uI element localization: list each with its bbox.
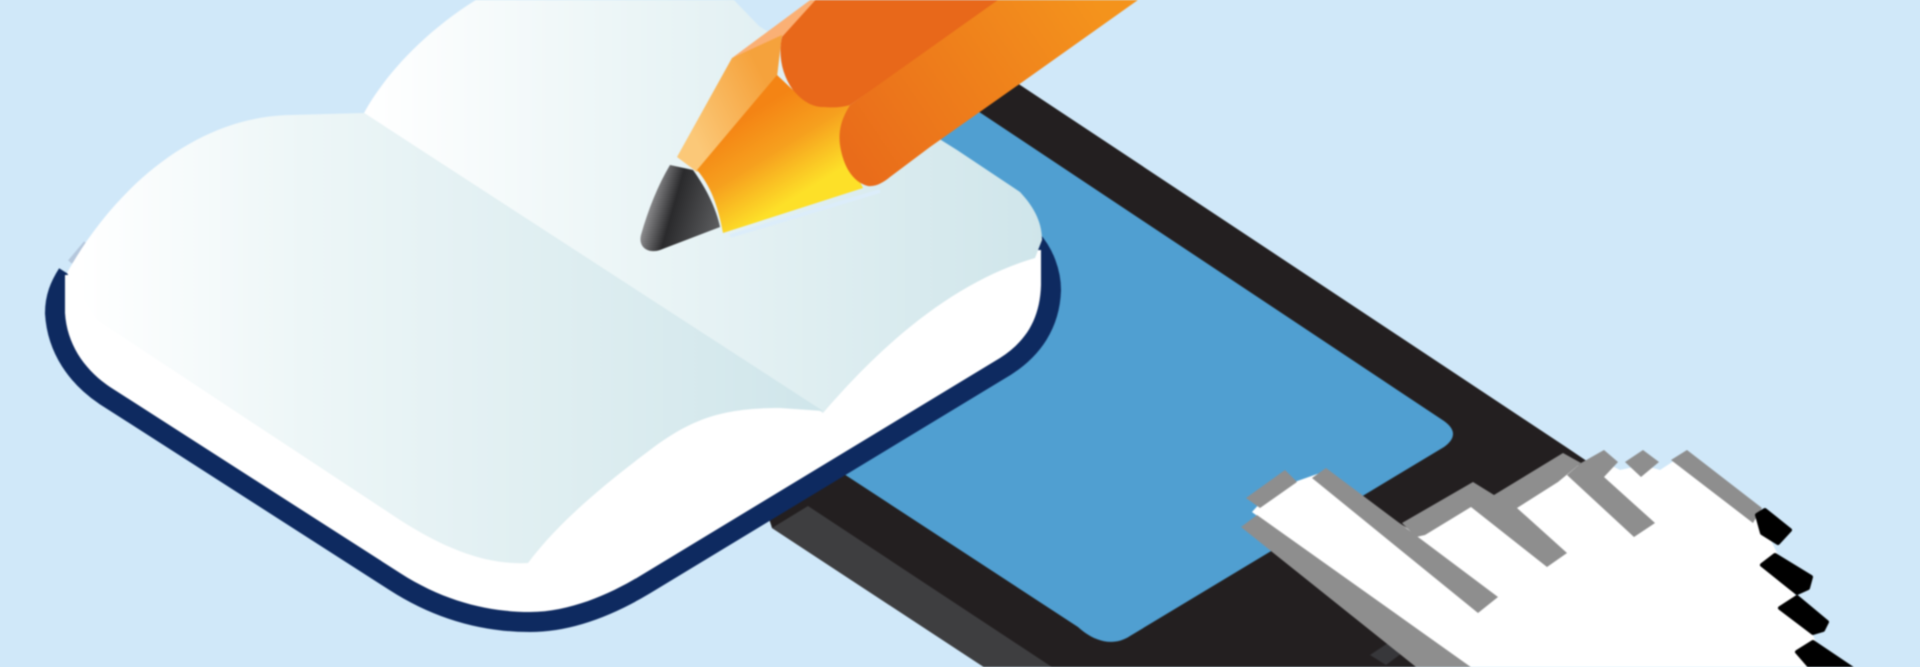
wood main facet — [697, 75, 863, 233]
pencil barrel dark facet — [780, 0, 1010, 107]
hand cursor — [1241, 450, 1862, 667]
right page — [364, 0, 1042, 413]
open book — [65, 0, 1042, 612]
pencil lead tip — [640, 165, 720, 251]
tablet — [700, 2, 1600, 667]
book cover outline — [65, 246, 1041, 612]
tablet button — [1370, 643, 1402, 665]
faint cover trace — [70, 243, 86, 262]
book cover white — [65, 250, 1041, 612]
left page — [67, 113, 823, 563]
hand fill — [1252, 457, 1835, 667]
tablet screen — [700, 46, 1453, 642]
tablet side edge — [772, 506, 1064, 667]
hand black outline steps — [1757, 510, 1862, 667]
pencil barrel light facet — [839, 0, 1145, 186]
pencil — [640, 0, 1145, 251]
pencil top highlight — [732, 0, 840, 58]
tablet body — [700, 2, 1600, 667]
hand grey shading — [1241, 450, 1762, 667]
pencil glow line — [730, 191, 880, 236]
wood light facet — [677, 35, 782, 172]
